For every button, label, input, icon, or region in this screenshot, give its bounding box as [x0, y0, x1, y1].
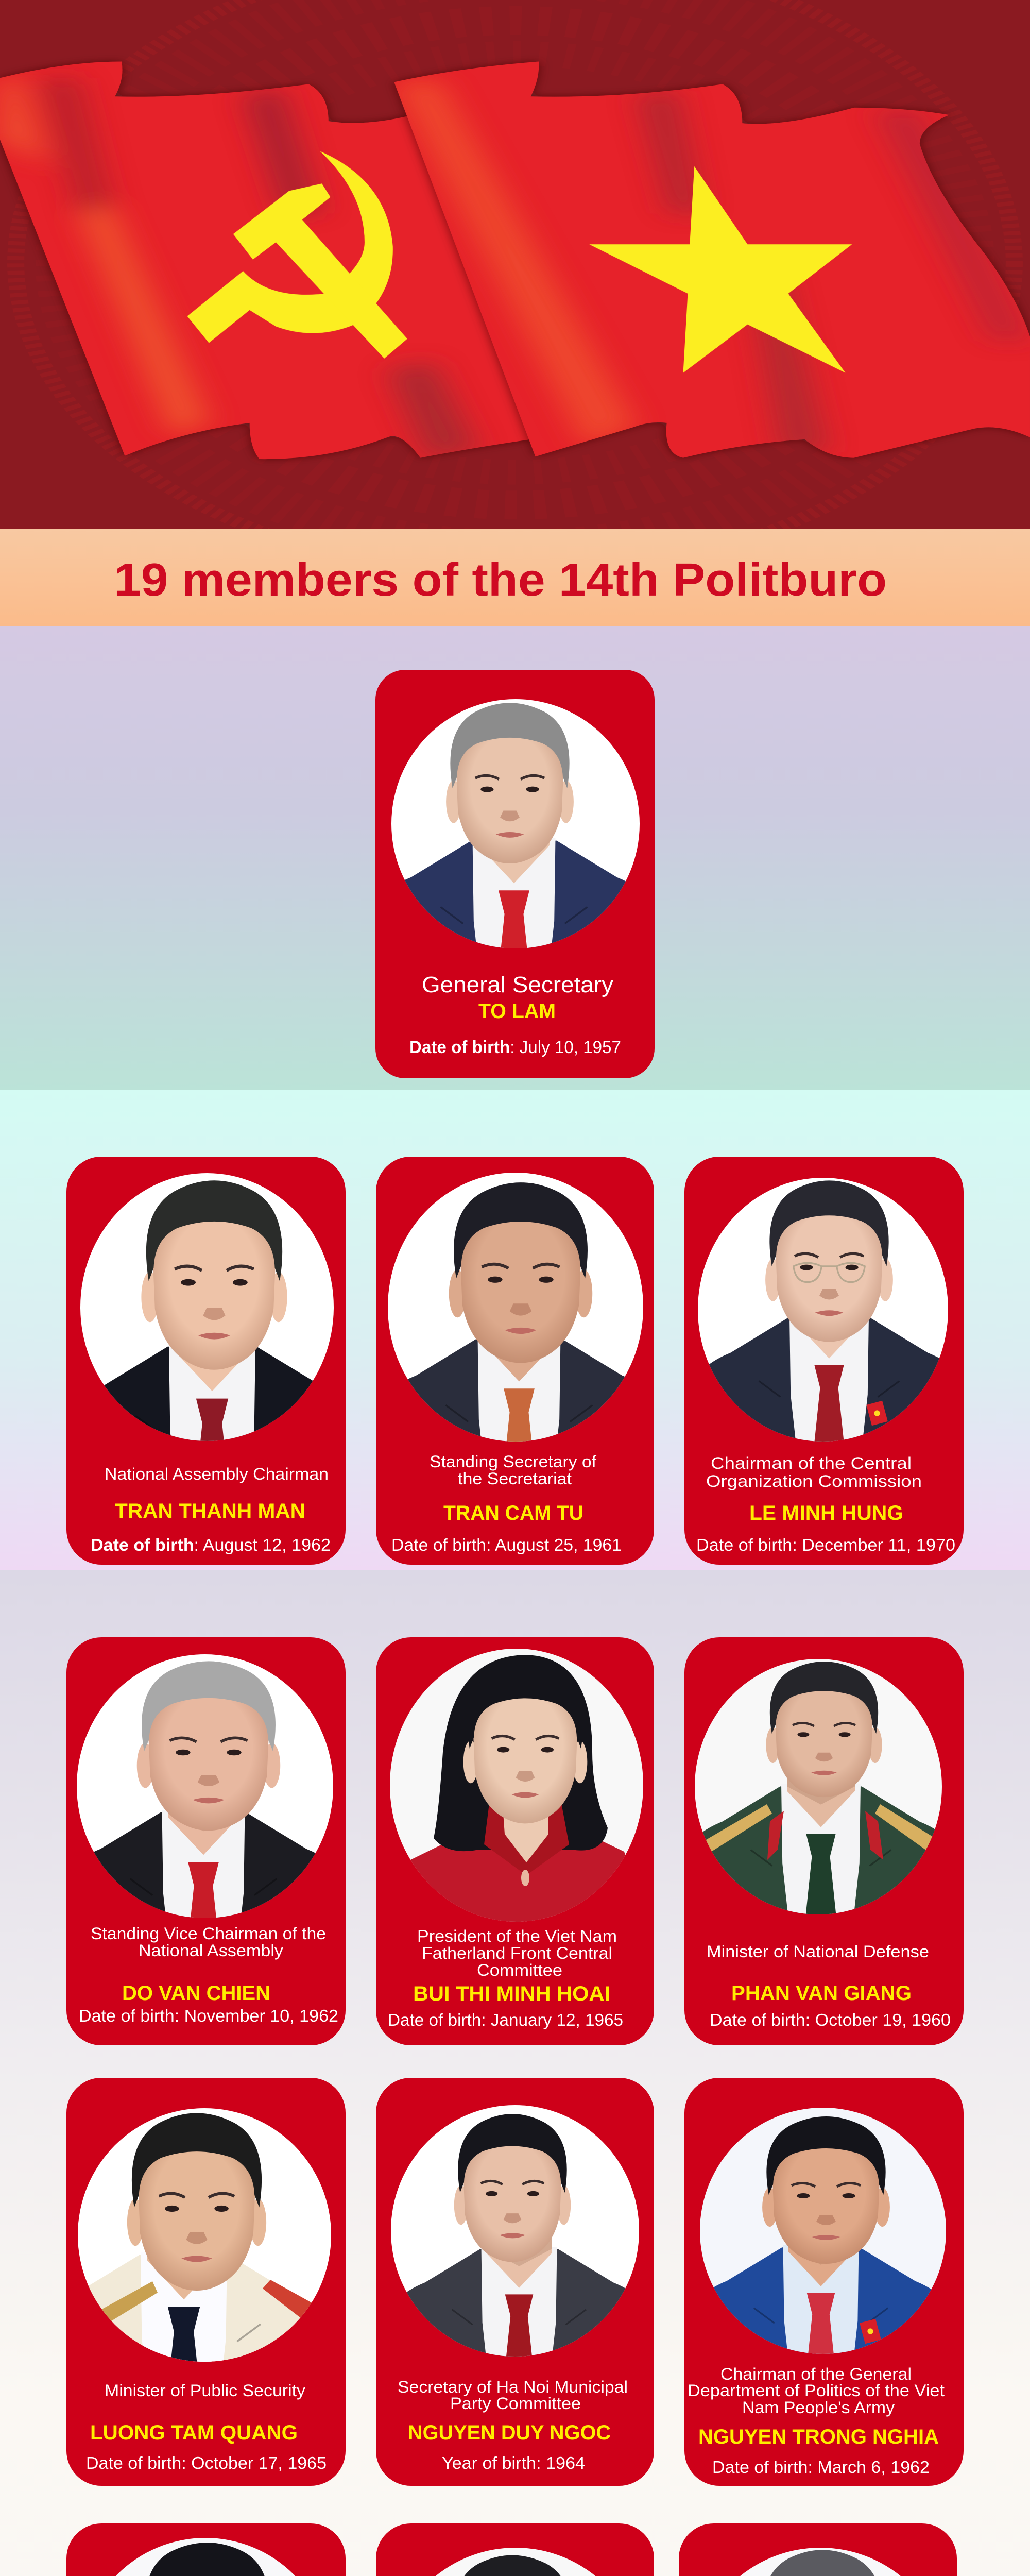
card: Nguyen Duy Ngoc: Year of birth: 1964	[442, 2453, 585, 2472]
background: mint to pink band	[0, 1090, 1030, 1570]
card: Luong Tam Quang	[0, 2078, 375, 2576]
right flag	[394, 62, 1030, 458]
card: Luong Tam Quang: Minister of Public Security	[105, 2381, 305, 2400]
card: Phan Van Giang	[645, 1637, 997, 2090]
card: Nguyen Trong Nghia: Department of Politics of the Viet	[688, 2381, 945, 2400]
card: Nguyen Duy Ngoc: Secretary of Ha Noi Municipal	[398, 2378, 628, 2396]
card: Do Van Chien: Date of birth: November 10, 1962	[79, 2006, 338, 2025]
card: To Lam: Date of birth: July 10, 1957	[409, 1038, 621, 1057]
card: Trinh Van Quyet	[20, 2523, 387, 2576]
card: Phan Van Giang: Date of birth: October 19, 1960	[710, 2010, 951, 2029]
card: Le Minh Hung: LE MINH HUNG	[749, 1502, 903, 1524]
card: Phan Van Giang: PHAN VAN GIANG	[731, 1982, 912, 2005]
card: Nguyen Trong Nghia: Nam People's Army	[742, 2398, 895, 2417]
card: Tran Cam Tu: the Secretariat	[458, 1469, 572, 1488]
card: Luong Tam Quang: Date of birth: October 17, 1965	[86, 2453, 327, 2472]
card: Bui Thi Minh Hoai: President of the Viet Nam	[417, 1927, 617, 1945]
card: Le Minh Hung	[654, 1157, 1005, 1621]
card: Tran Thanh Man: TRAN THANH MAN	[115, 1500, 305, 1522]
background: pale lilac band	[0, 1570, 1030, 2576]
card: Nguyen Duy Ngoc	[351, 2078, 687, 2539]
card: Le Minh Hung: Chairman of the Central	[711, 1454, 912, 1472]
card: Nguyen Duy Ngoc: NGUYEN DUY NGOC	[408, 2421, 611, 2444]
card: Tran Cam Tu	[336, 1157, 702, 1656]
card: To Lam	[331, 670, 697, 1158]
left flag	[0, 62, 558, 460]
card: Nguyen Duy Ngoc: Party Committee	[450, 2394, 581, 2413]
card: Bui Thi Minh Hoai	[376, 1637, 654, 2045]
card: Tran Thanh Man: National Assembly Chairman	[105, 1465, 329, 1483]
card: Do Van Chien: Standing Vice Chairman of the	[91, 1924, 326, 1943]
card: Tran Cam Tu: Date of birth: August 25, 1961	[391, 1535, 622, 1554]
card: Do Van Chien: National Assembly	[139, 1941, 283, 1960]
background: lavender to mint band	[0, 626, 1030, 1090]
card: Le Hoai Trung	[337, 2523, 688, 2576]
card: Do Van Chien: DO VAN CHIEN	[122, 1982, 270, 2005]
card: Nguyen Trong Nghia: Chairman of the General	[720, 2365, 912, 2383]
card: Nguyen Trong Nghia	[653, 2078, 989, 2537]
title band: 19 members of the 14th Politburo	[114, 554, 887, 606]
icon: yellow star	[589, 166, 852, 373]
title band	[0, 529, 1030, 626]
card: Tran Cam Tu: TRAN CAM TU	[443, 1502, 583, 1524]
card: Nguyen Trong Nghia: NGUYEN TRONG NGHIA	[698, 2426, 939, 2448]
card: Tran Thanh Man	[21, 1157, 404, 1678]
card: Tran Cam Tu: Standing Secretary of	[430, 1452, 596, 1471]
card: Phan Van Giang: Minister of National Defense	[707, 1942, 929, 1961]
card: Bui Thi Minh Hoai: Date of birth: January 12, 1965	[388, 2010, 623, 2029]
hero banner: party flag and national flag	[0, 0, 1030, 575]
icon: hammer and sickle	[187, 151, 407, 359]
card: Bui Thi Minh Hoai: Committee	[477, 1961, 562, 1979]
card: Bui Thi Minh Hoai: BUI THI MINH HOAI	[413, 1982, 610, 2005]
card: Le Minh Tri	[642, 2523, 993, 2576]
card: To Lam: TO LAM	[478, 1000, 556, 1023]
card: Tran Thanh Man: Date of birth: August 12, 1962	[91, 1535, 331, 1554]
card: To Lam: General Secretary	[422, 972, 613, 997]
card: Bui Thi Minh Hoai: Fatherland Front Central	[422, 1944, 612, 1962]
card: Le Minh Hung: Date of birth: December 11, 1970	[696, 1535, 955, 1554]
card: Luong Tam Quang: LUONG TAM QUANG	[90, 2421, 298, 2444]
card: Nguyen Trong Nghia: Date of birth: March 6, 1962	[712, 2458, 930, 2477]
card: Do Van Chien	[20, 1637, 387, 2130]
card: Le Minh Hung: Organization Commission	[706, 1472, 922, 1490]
